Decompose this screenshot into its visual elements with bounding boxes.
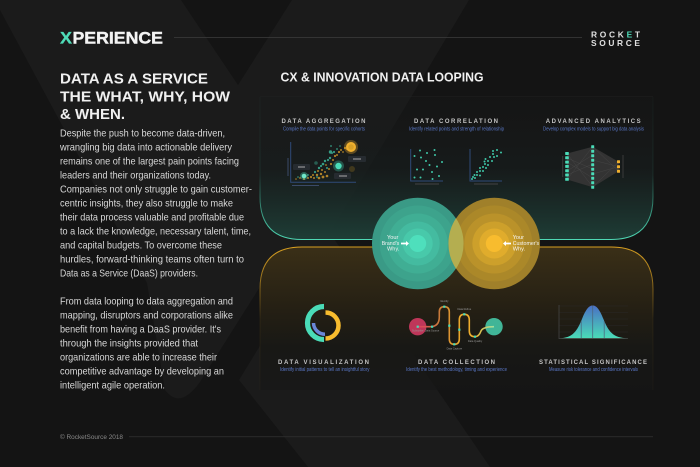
chart: data aggregation scatter xyxy=(288,140,366,186)
panel: bottom gold xyxy=(260,247,653,390)
heading: THE WHAT, WHY, HOW xyxy=(60,90,230,106)
statistical significance heading: STATISTICAL SIGNIFICANCE xyxy=(539,360,647,366)
chart heading: CX & INNOVATION DATA LOOPING xyxy=(280,70,484,85)
text block: first paragraph: to a lack the knowledge, necessary talent, time, xyxy=(60,226,251,238)
header: RocketSource logo: SOURCE xyxy=(591,38,640,48)
data visualization heading: DATA VISUALIZATION xyxy=(278,360,369,366)
background pattern xyxy=(0,0,490,467)
label: your customer's why: Why. xyxy=(513,246,525,252)
chart: linear correlation xyxy=(470,149,502,184)
text block: first paragraph: and capital budgets. To overcome these xyxy=(60,240,222,252)
header: Xperience logo: X xyxy=(60,28,73,48)
text block: second paragraph: benefit from having a DaaS provider. It's xyxy=(60,324,221,336)
data collection heading: Identify the best methodology, timing and experience xyxy=(406,367,507,373)
chart: data collection path: Data Quality xyxy=(468,339,483,343)
data collection heading xyxy=(406,360,507,373)
label: your brand's why: Brand's xyxy=(382,241,399,247)
statistical significance heading xyxy=(539,360,647,373)
data visualization heading: Identify initial patterns to tell an insightful story xyxy=(280,367,370,373)
text block: first paragraph: Data as a Service (DaaS) providers. xyxy=(60,268,198,280)
chart: data visualization donut xyxy=(308,306,338,340)
panel: top teal xyxy=(260,96,653,240)
chart: data collection path xyxy=(409,299,503,350)
header: RocketSource logo: ROCK E T xyxy=(591,29,641,39)
text block: second paragraph: mapping, disruptors and corporations alike xyxy=(60,310,233,322)
venn: brand circle xyxy=(372,198,463,289)
text block: second paragraph: through the insights provided that xyxy=(60,338,198,350)
header: RocketSource logo xyxy=(591,29,641,48)
text block: second paragraph: intelligent agile operation. xyxy=(60,380,165,392)
venn: overlap xyxy=(448,218,464,269)
data correlation heading xyxy=(409,119,504,132)
data correlation heading: DATA CORRELATION xyxy=(414,119,498,125)
heading: DATA AS A SERVICE xyxy=(60,72,208,88)
statistical significance heading: Measure risk tolerance and confidence intervals xyxy=(549,367,638,373)
data aggregation heading: DATA AGGREGATION xyxy=(282,119,366,125)
data aggregation heading xyxy=(282,119,366,132)
chart: data collection path: Identify xyxy=(440,299,449,303)
data aggregation heading: Compile the data points for specific cohorts xyxy=(283,126,365,132)
label: your brand's why xyxy=(382,235,409,252)
text block: first paragraph xyxy=(59,128,252,280)
label: your brand's why: Why. xyxy=(387,246,400,252)
chart: data collection path: Data Capture xyxy=(447,346,463,350)
chart: scattered correlation xyxy=(411,149,443,184)
data collection heading: DATA COLLECTION xyxy=(418,360,495,366)
chart: neural network xyxy=(562,145,624,189)
text block: first paragraph: wrangling big data into actionable delivery xyxy=(59,142,233,154)
data visualization heading xyxy=(278,360,370,373)
chart: data collection path: Data Source xyxy=(425,328,440,332)
text block: second paragraph: organizations are able to increase their xyxy=(60,352,218,364)
data correlation heading: Identify related points and strength of relationship xyxy=(409,126,504,132)
text block: first paragraph: centric insights, they also struggle to make xyxy=(60,198,233,210)
label: your customer's why: Your xyxy=(513,235,524,241)
footer: © RocketSource 2018 xyxy=(60,434,124,441)
chart: bell curve xyxy=(559,305,628,339)
text block: second paragraph: competitive advantage by developing an xyxy=(60,366,224,378)
chart: data collection path: Data Refine xyxy=(457,307,472,311)
text block: first paragraph: Companies not only struggle to gain customer- xyxy=(60,184,252,196)
heading: & WHEN. xyxy=(60,107,125,123)
text block: first paragraph: their data process valuable and profitable due xyxy=(60,212,244,224)
advanced analytics heading: ADVANCED ANALYTICS xyxy=(546,119,641,125)
advanced analytics heading: Develop complex models to support big data analysis xyxy=(543,126,644,132)
text block: first paragraph: remains one of the largest pain points facing xyxy=(60,156,239,168)
label: your customer's why xyxy=(503,235,539,252)
header rule xyxy=(174,36,582,39)
text block: first paragraph: hurdles, forward-thinking teams often turn to xyxy=(60,254,244,266)
label: your customer's why: Customer's xyxy=(513,241,539,247)
heading xyxy=(60,72,230,123)
text block: second paragraph: From data looping to data aggregation and xyxy=(60,296,233,308)
venn: customer circle xyxy=(449,198,540,289)
text block: first paragraph: leaders and their organizations today. xyxy=(60,170,211,182)
text block: first paragraph: Despite the push to become data-driven, xyxy=(60,128,225,140)
chart: data collection path: Subscribe xyxy=(412,328,424,332)
advanced analytics heading xyxy=(543,119,644,132)
label: your brand's why: Your xyxy=(387,235,398,241)
header: Xperience logo: PERIENCE xyxy=(72,28,163,48)
text block: second paragraph xyxy=(60,296,233,392)
